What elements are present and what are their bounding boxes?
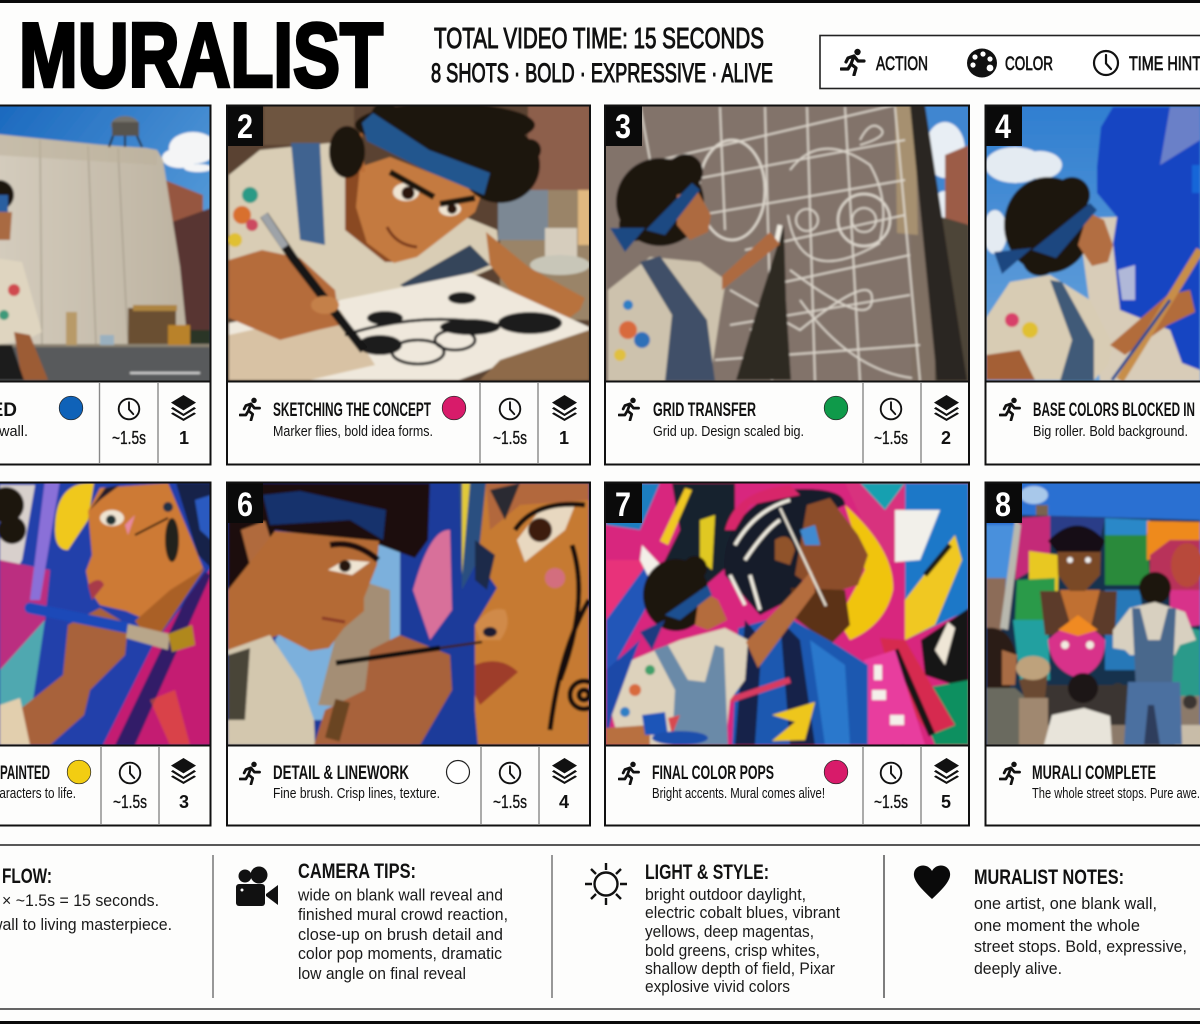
caption strip: 2 bbox=[941, 428, 951, 448]
text: light and style: electric cobalt blues, vibrant bbox=[645, 903, 840, 922]
card frame bbox=[986, 106, 1200, 464]
caption strip bbox=[0, 382, 211, 464]
caption strip bbox=[227, 746, 590, 825]
subtitle: TOTAL VIDEO TIME: 15 SECONDS bbox=[434, 23, 764, 55]
caption strip: 3 bbox=[179, 792, 189, 812]
text: camera tips: color pop moments, dramatic bbox=[298, 944, 502, 963]
caption strip: Bright accents. Mural comes alive! bbox=[652, 786, 825, 802]
text: light and style: yellows, deep magentas, bbox=[645, 922, 814, 941]
badge: 7: 7 bbox=[615, 486, 631, 524]
panel: shot 2 bbox=[225, 100, 595, 464]
card frame bbox=[227, 482, 590, 826]
title: MURALIST bbox=[19, 6, 383, 106]
badge: 4 bbox=[985, 105, 1022, 146]
caption strip bbox=[0, 746, 211, 825]
text: flow: FLOW: bbox=[2, 865, 52, 888]
panel: shot 6 bbox=[225, 478, 598, 826]
icon: clock bbox=[1094, 51, 1118, 75]
legend label: action: ACTION bbox=[876, 54, 928, 75]
text: light and style: explosive vivid colors bbox=[645, 977, 790, 996]
caption strip: 5 bbox=[941, 792, 951, 812]
badge: 4: 4 bbox=[995, 108, 1011, 146]
card frame bbox=[605, 106, 969, 464]
text: light and style: LIGHT & STYLE: bbox=[645, 861, 769, 884]
badge: 2 bbox=[227, 105, 263, 146]
caption strip: 1 bbox=[559, 428, 569, 448]
image: base colors bbox=[980, 100, 1200, 385]
caption strip: FINAL COLOR POPS bbox=[652, 763, 774, 784]
badge: 6 bbox=[227, 482, 263, 524]
top black bar bbox=[0, 0, 1200, 3]
text: muralist notes: deeply alive. bbox=[974, 959, 1062, 978]
text: light and style bbox=[645, 861, 840, 996]
image: mural complete bbox=[980, 478, 1200, 748]
text: muralist notes: MURALIST NOTES: bbox=[974, 866, 1124, 889]
text: camera tips: low angle on final reveal bbox=[298, 964, 466, 983]
caption strip: Marker flies, bold idea forms. bbox=[273, 424, 433, 440]
caption strip: 1 bbox=[179, 428, 189, 448]
image: detail and linework bbox=[225, 478, 598, 748]
icon: video camera bbox=[236, 866, 278, 906]
card frame bbox=[0, 106, 210, 464]
badge: 3 bbox=[605, 105, 642, 146]
caption strip: Grid up. Design scaled big. bbox=[653, 424, 804, 440]
caption strip: ~1.5s bbox=[874, 428, 908, 448]
badge: 8 bbox=[985, 482, 1022, 524]
image: blank wall bbox=[0, 100, 220, 386]
badge: 3: 3 bbox=[615, 108, 631, 146]
caption strip: ~1.5s bbox=[493, 792, 527, 812]
subtitle: 8 SHOTS · BOLD · EXPRESSIVE · ALIVE bbox=[431, 58, 773, 88]
text: muralist notes bbox=[974, 866, 1187, 978]
caption strip bbox=[605, 382, 969, 464]
panel: shot 5 bbox=[0, 478, 215, 826]
caption strip bbox=[605, 746, 969, 825]
text: light and style: bright outdoor daylight, bbox=[645, 885, 806, 904]
image: grid transfer bbox=[600, 100, 975, 385]
text: flow: × ~1.5s = 15 seconds. bbox=[2, 891, 159, 910]
badge: 7 bbox=[605, 482, 642, 524]
image: final color pops bbox=[600, 478, 975, 748]
image: sketching bbox=[225, 100, 595, 385]
text: camera tips bbox=[297, 860, 508, 983]
legend bbox=[820, 36, 1200, 88]
card frame bbox=[0, 482, 210, 826]
badge: 8: 8 bbox=[995, 486, 1011, 524]
icon: sun bbox=[585, 863, 627, 905]
image: characters painted bbox=[0, 478, 215, 748]
caption strip: ~1.5s bbox=[113, 792, 147, 812]
caption strip bbox=[985, 746, 1200, 802]
caption strip: DETAIL & LINEWORK bbox=[273, 763, 409, 784]
panel: shot 7 bbox=[600, 478, 975, 826]
panel: shot 1 bbox=[0, 100, 220, 464]
icon: action runner bbox=[841, 49, 864, 75]
caption strip: ~1.5s bbox=[493, 428, 527, 448]
caption strip: ~1.5s bbox=[112, 428, 146, 448]
text: camera tips: close-up on brush detail and bbox=[298, 925, 503, 944]
legend label: color: COLOR bbox=[1005, 54, 1053, 75]
caption strip: Fine brush. Crisp lines, texture. bbox=[273, 786, 440, 802]
text: light and style: shallow depth of field, Pixar bbox=[645, 959, 835, 978]
badge: 6: 6 bbox=[237, 486, 253, 524]
card frame bbox=[227, 106, 590, 464]
card frame bbox=[605, 482, 969, 826]
text: camera tips: wide on blank wall reveal and bbox=[297, 886, 503, 904]
text: camera tips: finished mural crowd reaction, bbox=[298, 905, 508, 924]
icon: heart bbox=[914, 865, 950, 899]
text: camera tips: CAMERA TIPS: bbox=[298, 860, 416, 883]
text: muralist notes: one moment the whole bbox=[974, 916, 1140, 935]
caption strip bbox=[227, 382, 590, 464]
panel: footer bbox=[0, 845, 1200, 1024]
caption strip: 4 bbox=[559, 792, 569, 812]
text: muralist notes: street stops. Bold, expressive, bbox=[974, 937, 1187, 956]
panel: shot 3 bbox=[600, 100, 975, 464]
subtitle bbox=[431, 23, 773, 88]
text: flow bbox=[0, 865, 172, 934]
icon: palette bbox=[967, 48, 997, 78]
caption strip bbox=[985, 382, 1200, 440]
panel: shot 4 bbox=[980, 100, 1200, 464]
caption strip: ~1.5s bbox=[874, 792, 908, 812]
panel: shot 8 bbox=[980, 478, 1200, 826]
caption strip: GRID TRANSFER bbox=[653, 400, 756, 421]
text: muralist notes: one artist, one blank wall, bbox=[974, 894, 1157, 913]
caption strip: SKETCHING THE CONCEPT bbox=[273, 400, 431, 421]
card frame bbox=[986, 482, 1200, 826]
caption strip: PAINTED bbox=[0, 763, 50, 784]
text: light and style: bold greens, crisp whites, bbox=[645, 941, 820, 960]
badge: 2: 2 bbox=[237, 108, 253, 146]
